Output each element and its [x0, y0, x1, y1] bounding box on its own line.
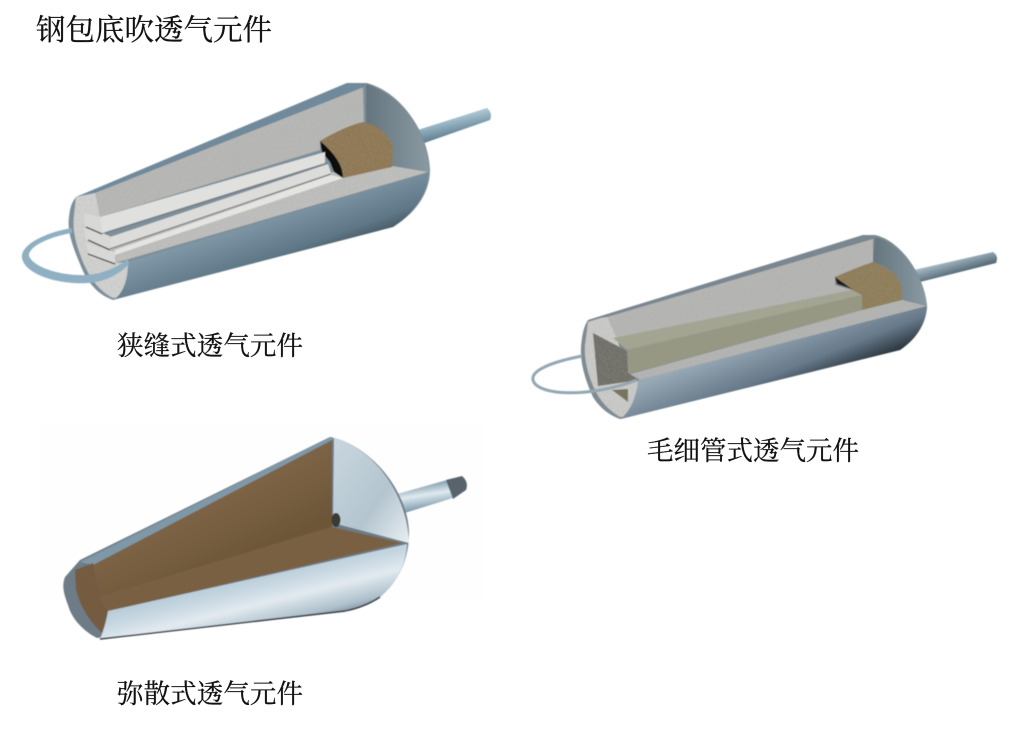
wire loop	[533, 356, 637, 393]
wire ribbon	[22, 228, 129, 283]
lower shell	[115, 173, 428, 299]
caption: capillary type: 毛细管式透气元件	[647, 436, 859, 466]
illustration: dispersion purge plug	[40, 422, 484, 639]
lower shell	[100, 544, 407, 639]
outer body silhouette	[581, 235, 927, 419]
back wall	[873, 237, 927, 305]
top rim	[80, 437, 334, 565]
illustration: slit-type purge plug	[22, 83, 491, 300]
outer body silhouette	[69, 83, 430, 300]
upper concrete wall	[607, 238, 873, 338]
slats	[84, 152, 343, 264]
top rim	[588, 235, 875, 320]
title: 钢包底吹透气元件	[36, 14, 272, 47]
rear pin	[905, 252, 997, 285]
bottom edge shadow	[100, 597, 380, 639]
floor concrete	[627, 300, 927, 381]
faint image backdrop	[40, 422, 484, 600]
brown plug	[320, 122, 393, 178]
brown plug	[835, 262, 902, 310]
capillary bar	[593, 290, 862, 402]
inner socket	[332, 513, 340, 527]
back wall	[333, 438, 409, 543]
outer body silhouette	[63, 437, 409, 638]
end face	[73, 192, 128, 298]
illustration: capillary purge plug	[533, 235, 997, 419]
caption: slit type: 狭缝式透气元件	[117, 331, 303, 361]
top rim	[76, 83, 366, 197]
end brown	[75, 563, 108, 633]
floor concrete	[100, 166, 428, 263]
end face	[585, 316, 638, 417]
caption: dispersion type: 弥散式透气元件	[117, 679, 303, 709]
brown wall	[93, 440, 332, 597]
back wall	[366, 84, 429, 172]
upper concrete wall	[95, 87, 392, 217]
lower shell	[621, 306, 927, 419]
floor	[100, 527, 402, 611]
rear pin	[390, 480, 453, 516]
rear pin	[405, 108, 491, 148]
